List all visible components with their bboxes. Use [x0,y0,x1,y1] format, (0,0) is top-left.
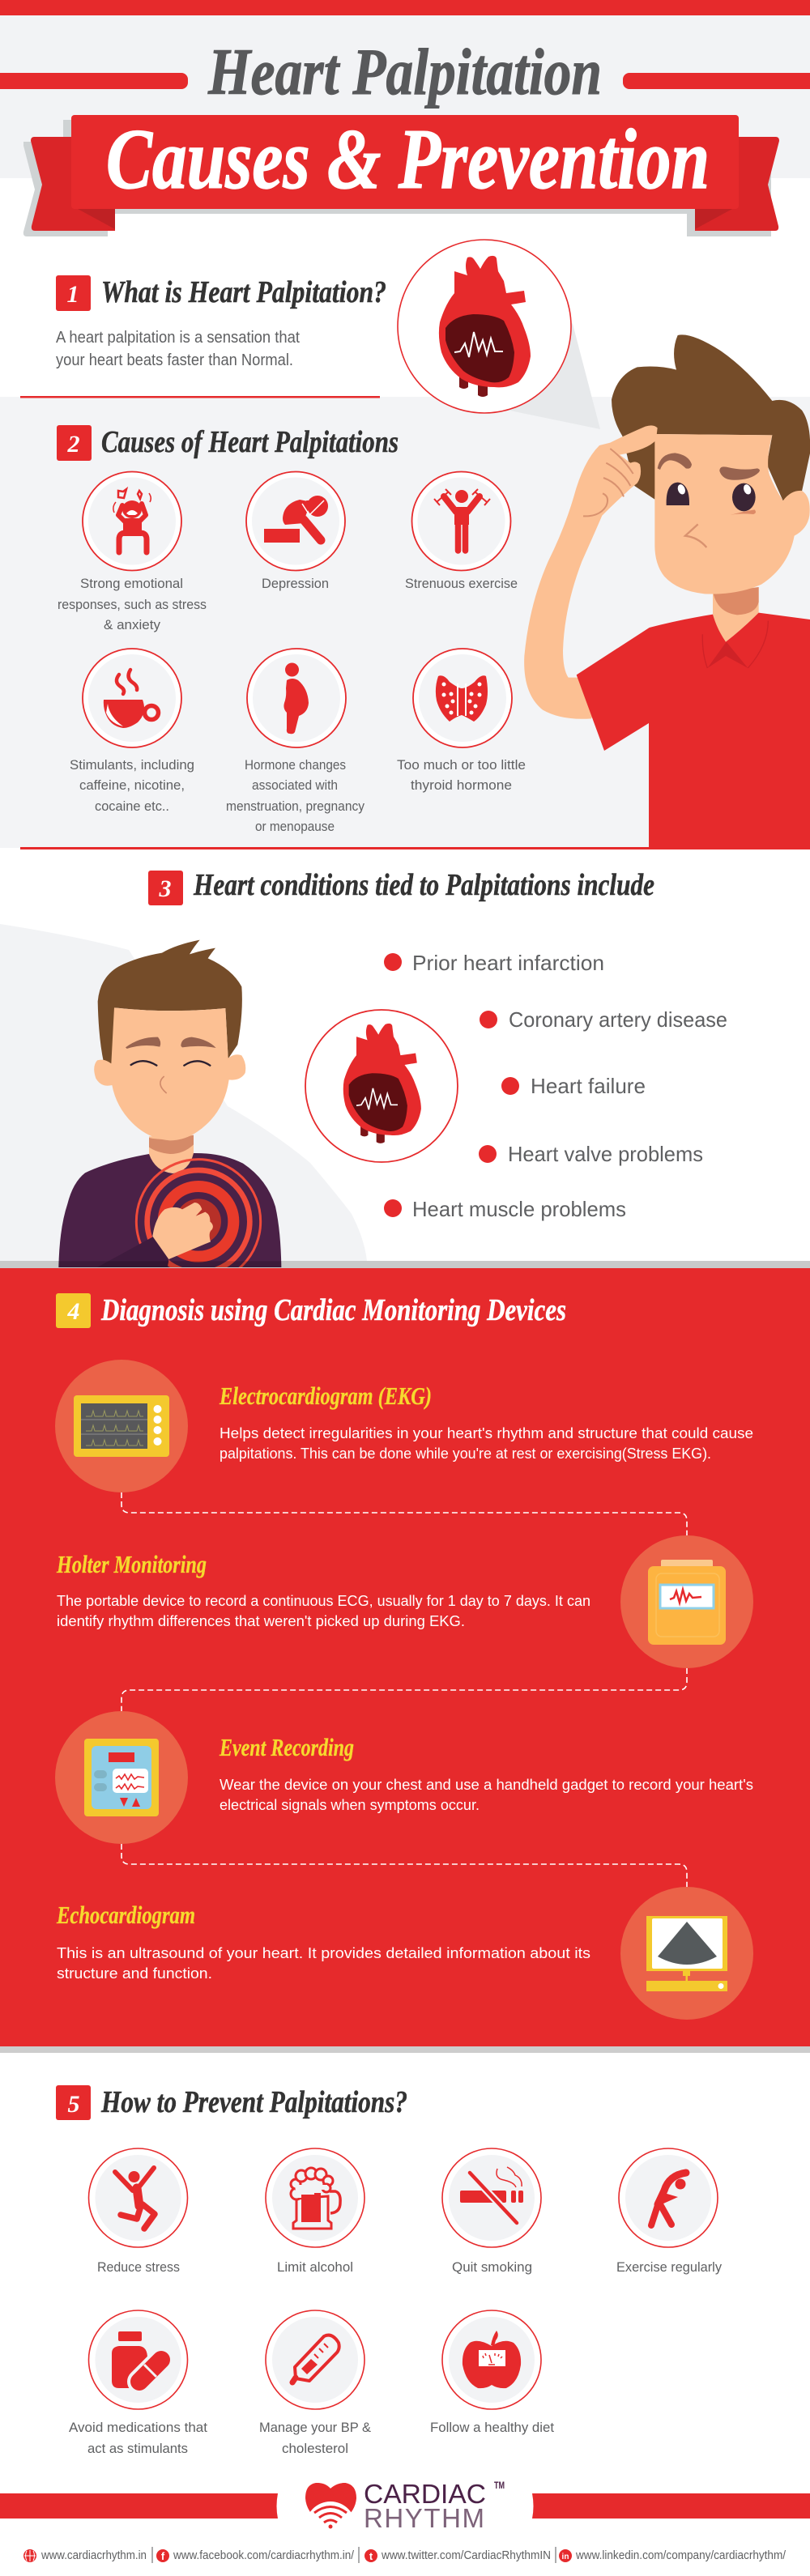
cause labels row 2: Hormone changes [245,757,346,773]
text: Holter Monitoring: The portable device to record a continuous ECG, usually for 1 day to 7 days. It can [57,1593,590,1609]
prevention labels row 1: Exercise regularly [616,2259,722,2275]
prevention labels row 2 [69,2420,554,2456]
prevention labels row 1: Quit smoking [452,2259,532,2275]
icon: event recorder [55,1711,188,1844]
cause: strenuous exercise [411,471,510,570]
section 2 heading: causes: 2 [66,431,79,458]
cause labels row 1: & anxiety [104,617,160,632]
prevention labels row 1: Limit alcohol [277,2259,353,2275]
panel: diagnosis red section: 4 [66,1298,79,1325]
footer links: t [369,2550,373,2562]
condition list [384,951,727,1221]
footer links: www.facebook.com/cardiacrhythm.in/ [173,2548,355,2562]
cause labels row 2 [70,757,526,834]
ribbon banner: Causes & Prevention [23,112,779,236]
footer links: www.twitter.com/CardiacRhythmIN [381,2548,551,2562]
cause: thyroid [413,649,512,747]
icon: quit smoking [442,2148,541,2247]
section 1: what is heart palpitation: A heart palpitation is a sensation that [56,329,300,347]
condition list: Heart valve problems [508,1142,703,1166]
section 5 heading: prevention: How to Prevent Palpitations? [100,2085,407,2119]
speech bubble with heart icon [398,240,600,429]
icon: limit alcohol [266,2148,364,2247]
section 1: what is heart palpitation: What is Heart Palpitation? [101,275,386,309]
cause labels row 2: caffeine, nicotine, [79,777,185,793]
text: Echocardiogram [56,1901,590,1982]
icon: avoid medications [89,2310,188,2409]
panel: diagnosis red section [0,1268,810,2053]
cause labels row 2: thyroid hormone [411,777,512,793]
grey strip above red section [0,1261,810,1268]
text: Holter Monitoring: Holter Monitoring [56,1550,207,1578]
section 1: what is heart palpitation: 1 [66,281,79,308]
cause: hormone changes [247,649,346,747]
footer links: f [161,2550,165,2562]
icon: healthy diet apple [442,2310,541,2409]
prevention labels row 2: Follow a healthy diet [430,2420,554,2435]
footer red bands [0,2493,810,2519]
prevention labels row 2: Avoid medications that [69,2420,207,2435]
section 1: what is heart palpitation [20,275,386,398]
text: Event Recording: Event Recording [219,1733,354,1761]
section 3 heading: heart conditions: 3 [159,875,172,902]
curved background blob behind man [0,924,367,1261]
prevention labels row 2: act as stimulants [87,2441,188,2456]
section 3 heading: heart conditions: Heart conditions tied to Palpitations include [193,868,654,902]
cause labels row 1: Depression [262,576,329,591]
icon: manage BP thermometer [266,2310,364,2409]
footer links: in [562,2553,569,2561]
text: Event Recording [219,1733,753,1813]
icon: ultrasound monitor [620,1887,753,2020]
icon: reduce stress [89,2148,188,2247]
footer links: www.cardiacrhythm.in [40,2548,147,2562]
section 2 heading: causes: Causes of Heart Palpitations [101,425,399,459]
cause labels row 2: Too much or too little [397,757,526,773]
text: Electrocardiogram: Electrocardiogram (EKG) [219,1382,432,1410]
logo: Cardiac Rhythm [305,2479,505,2552]
cause labels row 1: Strenuous exercise [405,576,518,591]
text: Electrocardiogram [219,1382,753,1462]
dashed connectors [122,1492,687,1887]
logo: Cardiac Rhythm: RHYTHM [364,2503,484,2533]
panel: diagnosis red section: Diagnosis using Cardiac Monitoring Devices [100,1293,566,1327]
text: Holter Monitoring [56,1550,590,1629]
prevention labels row 2: cholesterol [282,2441,348,2456]
cause labels row 2: Stimulants, including [70,757,194,773]
prevention labels row 1 [97,2259,722,2275]
footer links [23,2547,787,2563]
condition list: Coronary artery disease [509,1007,727,1032]
icon: EKG monitor [55,1360,188,1492]
logo: Cardiac Rhythm: TM [494,2480,505,2491]
man holding chest illustration [58,940,281,1284]
thinking man illustration [524,334,810,848]
text: Echocardiogram: This is an ultrasound of your heart. It provides detailed information about its [57,1945,590,1961]
condition list: Heart failure [531,1074,646,1098]
text: Electrocardiogram: Helps detect irregularities in your heart's rhythm and structure that could cause [220,1425,753,1441]
icon: Holter device [620,1535,753,1668]
section 1: what is heart palpitation: your heart beats faster than Normal. [56,351,293,369]
title: Heart Palpitation [0,35,810,109]
text: Holter Monitoring: identify rhythm differences that weren't picked up during EKG. [57,1613,465,1629]
red divider line under section 2 [20,847,810,849]
heart icon circle section 3 [305,1010,458,1162]
text: Event Recording: electrical signals when symptoms occur. [220,1797,480,1813]
cause labels row 1 [58,576,518,632]
section 5 heading: prevention: 5 [68,2091,79,2118]
prevention labels row 1: Reduce stress [97,2259,180,2275]
text: Electrocardiogram: palpitations. This can be done while you're at rest or exercising(Stress EKG). [220,1446,711,1462]
cause labels row 1: responses, such as stress [58,597,207,612]
footer links: www.linkedin.com/company/cardiacrhythm/ [575,2548,787,2562]
text: Echocardiogram: structure and function. [57,1965,212,1982]
cause labels row 2: associated with [252,777,338,793]
logo: Cardiac Rhythm: CARDIAC [364,2479,486,2509]
cause labels row 1: Strong emotional [80,576,183,591]
text: Echocardiogram: Echocardiogram [56,1901,195,1929]
text: Event Recording: Wear the device on your chest and use a handheld gadget to record your heart's [220,1777,753,1793]
section 2 heading: causes [57,425,399,461]
cause labels row 2: cocaine etc.. [95,798,169,814]
condition list: Heart muscle problems [412,1197,626,1221]
cause labels row 2: or menopause [255,819,335,834]
condition list: Prior heart infarction [412,951,604,975]
prevention labels row 2: Manage your BP & [259,2420,372,2435]
title: Heart Palpitation: Heart Palpitation [207,35,602,109]
cause: depression [246,471,345,570]
cause: stimulants coffee cup [83,649,181,747]
cause: strong emotional responses [83,471,181,570]
cause labels row 2: menstruation, pregnancy [226,798,364,814]
icon: exercise [619,2148,718,2247]
